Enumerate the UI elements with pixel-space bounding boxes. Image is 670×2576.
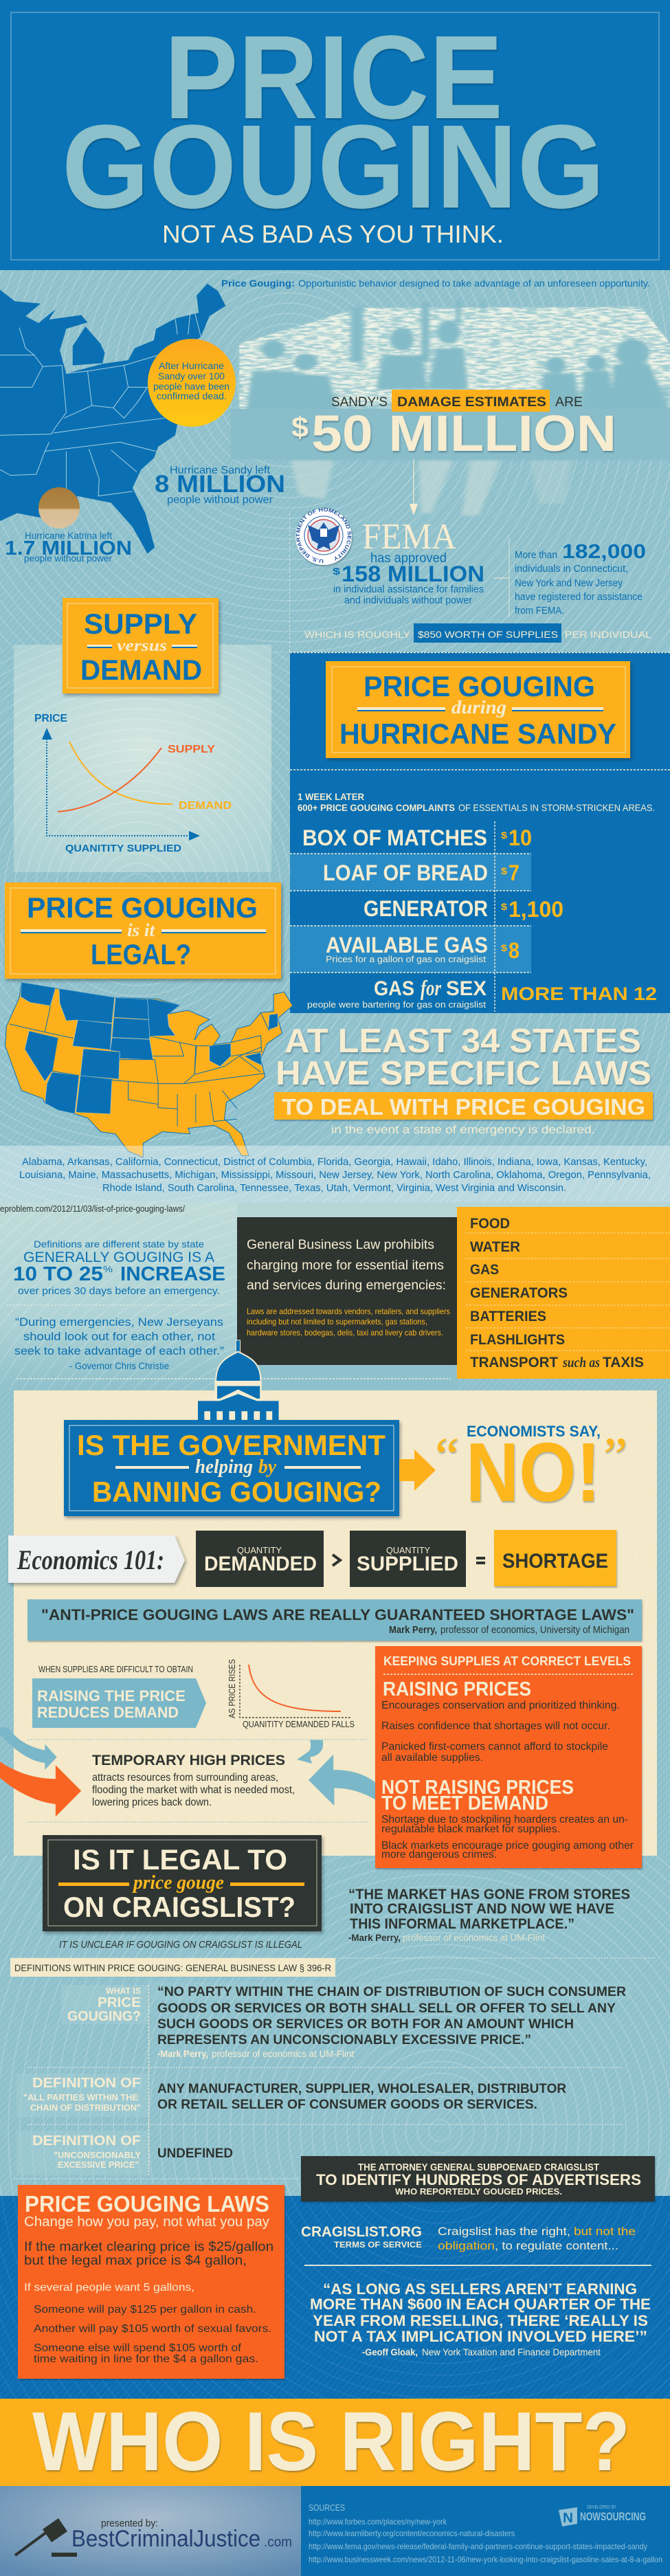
panel: price gouging laws: Change how you pay, not what you pay <box>24 2214 269 2230</box>
quote: market has gone: -Mark Perry, <box>348 1932 401 1943</box>
logo: nowsourcing: NOWSOURCING <box>580 2510 646 2523</box>
icon: gavel <box>15 2518 77 2557</box>
craigslist terms of service: TERMS OF SERVICE <box>334 2240 422 2250</box>
fema funding: in individual assistance for families <box>333 584 484 595</box>
heading: during hurricane sandy <box>326 661 630 758</box>
box: quantity supplied: SUPPLIED <box>357 1553 458 1575</box>
supplies per individual: PER INDIVIDUAL <box>565 629 651 640</box>
panel: general business law: hardware stores, bodegas, delis, taxi and livery cab drivers. <box>247 1328 443 1337</box>
economists say no: “ <box>435 1426 459 1486</box>
gouging percentage: INCREASE <box>120 1263 225 1285</box>
complaints note <box>298 791 655 813</box>
list of states <box>0 1146 670 1202</box>
symbol: greater than <box>333 1555 340 1566</box>
box: quantity demanded <box>196 1531 324 1587</box>
panel: supply and demand chart <box>14 645 271 872</box>
heading: is it legal on craigslist: IS IT LEGAL TO <box>73 1843 287 1876</box>
economists say no: NO! <box>466 1425 601 1519</box>
panel: price gouging during sandy <box>290 652 670 1013</box>
icon: capitol building <box>198 1340 279 1421</box>
footer: presented by: BestCriminalJustice <box>71 2526 260 2552</box>
callout: hurricane sandy dead: After Hurricane <box>159 360 224 371</box>
quote: chris christie: - Governor Chris Christie <box>69 1360 169 1371</box>
definition: what is price gouging: -Mark Perry, <box>157 2048 208 2059</box>
callout: hurricane sandy dead <box>148 339 236 427</box>
heading: is it legal on craigslist: ON CRAIGSLIST? <box>63 1891 295 1923</box>
damage estimates: DAMAGE ESTIMATES <box>397 395 546 410</box>
heading: supply versus demand: versus <box>117 637 167 655</box>
definition: what is price gouging: SUCH GOODS OR SERVICES OR BOTH FOR AN AMOUNT WHICH <box>157 2017 574 2032</box>
map: eastern united states <box>0 284 225 554</box>
big number: 50 MILLION <box>311 405 616 462</box>
panel: keeping supplies at correct levels: Panicked first-comers cannot afford to stockpile <box>381 1741 608 1753</box>
row: loaf of bread: $ <box>501 865 507 876</box>
left column: definitions <box>0 1202 670 1390</box>
fema registrations: New York and New Jersey <box>515 577 623 589</box>
logo: nowsourcing: DEVELOPED BY <box>587 2505 616 2510</box>
raising the price callout <box>32 1664 206 1728</box>
lower blue section <box>0 2196 670 2399</box>
definition: what is price gouging: GOODS OR SERVICES OR BOTH SHALL SELL OR OFFER TO SELL ANY <box>157 2001 616 2016</box>
temporary high prices <box>92 1753 295 1808</box>
row: generator: 1,100 <box>509 897 563 922</box>
row: gas for sex: MORE THAN 12 <box>501 984 657 1004</box>
craigslist terms of service <box>301 2224 636 2252</box>
quote: market has gone: INTO CRAIGSLIST AND NOW WE HAVE <box>350 1901 614 1917</box>
panel: general business law <box>237 1217 457 1365</box>
quote: anti-price gouging laws: "ANTI-PRICE GOUGING LAWS ARE REALLY GUARANTEED SHORTAGE LAWS" <box>41 1606 634 1623</box>
symbol: equals <box>476 1557 485 1564</box>
definition: all parties: OR RETAIL SELLER OF CONSUMER GOODS OR SERVICES. <box>157 2098 537 2112</box>
definition: what is price gouging: REPRESENTS AN UNCONSCIONABLY EXCESSIVE PRICE.” <box>157 2033 531 2047</box>
economists say no: ” <box>603 1426 627 1486</box>
title: price gouging: PRICE <box>164 10 503 144</box>
fema registrations: 182,000 <box>562 541 646 563</box>
heading: at least 34 states: HAVE SPECIFIC LAWS <box>276 1055 651 1092</box>
stat: katrina 1.7 million: people without power <box>24 553 112 564</box>
chart: demand curve <box>227 1659 355 1729</box>
chart: demand curve: QUANITITY DEMANDED FALLS <box>243 1719 355 1729</box>
quote: geoff gloak: NOT A TAX IMPLICATION INVOLVED HERE’” <box>314 2328 647 2345</box>
panel: price gouging laws: Someone else will spend $105 worth of <box>34 2342 242 2354</box>
fema registrations: have registered for assistance <box>515 591 643 603</box>
panel: essential items list: GENERATORS <box>470 1285 568 1301</box>
panel: keeping supplies at correct levels: all available supplies. <box>381 1752 483 1764</box>
quote: anti-price gouging laws <box>27 1599 642 1641</box>
definition: unconscionably excessive price: UNDEFINED <box>157 2146 233 2161</box>
definition: unconscionably excessive price <box>16 2131 233 2175</box>
footer: presented by <box>0 2486 301 2576</box>
chart: demand curve: AS PRICE RISES <box>227 1659 237 1718</box>
panel: essential items list: GAS <box>470 1262 499 1278</box>
quote: geoff gloak: MORE THAN $600 IN EACH QUARTER OF THE <box>310 2296 651 2313</box>
heading: supply versus demand <box>63 598 219 693</box>
raising the price callout: WHEN SUPPLIES ARE DIFFICULT TO OBTAIN <box>38 1664 193 1674</box>
fema funding: has approved <box>370 551 447 566</box>
panel: keeping supplies at correct levels: more dangerous crimes. <box>381 1849 497 1861</box>
quote: chris christie <box>14 1315 224 1371</box>
fema funding <box>333 517 484 606</box>
title banner <box>0 0 670 270</box>
craigslist terms of service: CRAGISLIST.ORG <box>301 2224 422 2240</box>
stat: katrina 1.7 million <box>5 530 132 564</box>
row: box of matches: 10 <box>509 825 532 850</box>
panel: keeping supplies at correct levels <box>375 1646 642 1868</box>
tag: economics 101: Economics 101: <box>16 1544 164 1575</box>
arrow: damage to fema <box>410 459 418 515</box>
quote: market has gone: “THE MARKET HAS GONE FROM STORES <box>348 1887 630 1902</box>
definition: unconscionably excessive price: EXCESSIVE PRICE" <box>58 2159 139 2170</box>
box: quantity supplied <box>350 1531 466 1587</box>
gouging percentage: Definitions are different state by state <box>34 1239 204 1250</box>
stat: sandy 8 million: 8 MILLION <box>155 471 285 498</box>
callout: attorney general <box>301 2156 655 2201</box>
fema funding: 158 MILLION <box>342 562 484 586</box>
definition: what is price gouging: “NO PARTY WITHIN THE CHAIN OF DISTRIBUTION OF SUCH CONSUMER <box>157 1985 626 1999</box>
supplies per individual: WHICH IS ROUGHLY <box>304 629 411 640</box>
row: gas for sex <box>307 975 657 1010</box>
row: gas for sex: GAS <box>374 977 414 1000</box>
quote: chris christie: should look out for each other, not <box>23 1330 215 1343</box>
row: generator: $ <box>501 901 507 912</box>
gouging percentage <box>13 1239 225 1297</box>
fema registrations <box>493 538 646 617</box>
panel: essential items list: FOOD <box>470 1216 510 1232</box>
panel: keeping supplies at correct levels: Black markets encourage price gouging among other <box>381 1840 634 1852</box>
quote: anti-price gouging laws: professor of economics, University of Michigan <box>440 1624 629 1636</box>
panel: essential items list: such as <box>562 1354 600 1370</box>
quote: market has gone: THIS INFORMAL MARKETPLACE.” <box>350 1916 574 1932</box>
panel: essential items list: FLASHLIGHTS <box>470 1332 565 1348</box>
panel: essential items list <box>457 1207 670 1379</box>
heading: during hurricane sandy: during <box>451 697 506 718</box>
definition: all parties: CHAIN OF DISTRIBUTION" <box>30 2102 141 2113</box>
panel: keeping supplies at correct levels: Shortage due to stockpiling hoarders creates an un- <box>381 1814 628 1825</box>
footer: sources: http://www.forbes.com/places/ny/new-york <box>309 2517 447 2527</box>
heading: is it legal on craigslist: price gouge <box>132 1872 224 1894</box>
callout: hurricane sandy dead: Sandy over 100 <box>158 370 225 381</box>
heading: supply versus demand: SUPPLY <box>84 608 197 640</box>
stat: sandy 8 million <box>155 465 285 506</box>
temporary high prices: lowering prices back down. <box>92 1797 212 1808</box>
arrow: to economists <box>399 1450 436 1491</box>
footer: sources <box>301 2486 670 2576</box>
panel: keeping supplies at correct levels: TO MEET DEMAND <box>381 1792 548 1814</box>
heading: during hurricane sandy: PRICE GOUGING <box>364 670 595 702</box>
quote: market has gone: professor of economics at UM-Flint <box>403 1932 545 1943</box>
panel: supply and demand chart: PRICE <box>34 713 67 724</box>
list of states: Louisiana, Maine, Massachusetts, Michigan, Mississippi, Missouri, New Jersey, New York, North Carolina, Oklahoma, Oregon, Pennsylvania, <box>19 1169 651 1181</box>
panel: general business law: charging more for essential items <box>247 1258 444 1273</box>
heading: is it legal: PRICE GOUGING <box>27 891 258 924</box>
row: loaf of bread: LOAF OF BREAD <box>323 860 488 885</box>
panel: general business law: including but not limited to supermarkets, gas stations, <box>247 1317 427 1326</box>
heading: is the government helping <box>64 1420 399 1516</box>
panel: essential items list: TRANSPORT <box>470 1355 558 1370</box>
panel: price gouging laws: Someone will pay $125 per gallon in cash. <box>34 2304 256 2316</box>
row: available gas: AVAILABLE GAS <box>326 933 488 957</box>
complaints note: 1 WEEK LATER <box>298 791 364 802</box>
panel: price gouging laws <box>18 2185 284 2379</box>
heading: is the government helping: IS THE GOVERNMENT <box>77 1429 386 1461</box>
panel: price gouging laws: PRICE GOUGING LAWS <box>25 2191 269 2217</box>
row: gas for sex: people were bartering for gas on craigslist <box>307 999 486 1010</box>
panel: essential items list: WATER <box>470 1239 520 1255</box>
heading: is the government helping: helping <box>195 1456 253 1478</box>
panel: price gouging laws: but the legal max price is $4 gallon, <box>24 2254 247 2268</box>
map: states with price gouging laws <box>5 982 293 1157</box>
definition: what is price gouging: PRICE <box>98 1995 141 2010</box>
row: box of matches: $ <box>501 830 507 841</box>
title: price gouging <box>62 10 605 233</box>
quote: geoff gloak: New York Taxation and Finance Department <box>422 2346 601 2357</box>
definitions heading: DEFINITIONS WITHIN PRICE GOUGING: GENERAL BUSINESS LAW § 396-R <box>14 1962 331 1973</box>
gouging percentage: over prices 30 days before an emergency. <box>18 1285 220 1297</box>
definition: all parties: ANY MANUFACTURER, SUPPLIER, WHOLESALER, DISTRIBUTOR <box>157 2082 566 2096</box>
fema funding: and individuals without power <box>344 595 472 606</box>
panel: price gouging laws: Another will pay $105 worth of sexual favors. <box>34 2323 271 2335</box>
panel: keeping supplies at correct levels: NOT RAISING PRICES <box>381 1777 574 1799</box>
heading: is it legal: LEGAL? <box>91 938 191 970</box>
quote: geoff gloak: “AS LONG AS SELLERS AREN’T EARNING <box>323 2280 637 2298</box>
complaints note: 600+ PRICE GOUGING COMPLAINTS <box>298 802 455 813</box>
note: unclear: IT IS UNCLEAR IF GOUGING ON CRAIGSLIST IS ILLEGAL <box>59 1939 302 1951</box>
fema funding: $ <box>333 566 340 577</box>
definitions heading <box>10 1958 335 1977</box>
quote: anti-price gouging laws: Mark Perry, <box>389 1624 437 1636</box>
definition: what is price gouging: WHAT IS <box>106 1986 141 1996</box>
definition: what is price gouging: GOUGING? <box>67 2009 141 2024</box>
row: loaf of bread: 7 <box>509 860 520 885</box>
callout: hurricane sandy dead: people have been <box>153 381 230 392</box>
panel: price gouging laws: If several people want 5 gallons, <box>24 2282 194 2294</box>
stat: sandy 8 million: people without power <box>167 494 273 506</box>
gouging percentage: GENERALLY GOUGING IS A <box>23 1250 214 1265</box>
temporary high prices: TEMPORARY HIGH PRICES <box>92 1753 285 1768</box>
heading: is it legal: is it <box>127 920 155 940</box>
list of states: Rhode Island, South Carolina, Tennessee, Texas, Utah, Vermont, Virginia, West Virginia and Wisconsin. <box>102 1182 566 1194</box>
definition: all parties: DEFINITION OF <box>32 2076 141 2091</box>
quote: geoff gloak: YEAR FROM RESELLING, THERE ‘REALLY IS <box>313 2312 648 2329</box>
gouging percentage: 10 TO 25 <box>13 1263 103 1285</box>
complaints note: OF ESSENTIALS IN STORM-STRICKEN AREAS. <box>458 802 655 813</box>
logo: nowsourcing: N <box>563 2511 573 2526</box>
quote: chris christie: seek to take advantage of each other.” <box>14 1344 224 1357</box>
stat: katrina 1.7 million: Hurricane Katrina left <box>25 530 112 541</box>
box: shortage <box>494 1530 616 1586</box>
footer: presented by: .com <box>264 2535 292 2550</box>
quote: geoff gloak: -Geoff Gloak, <box>362 2346 418 2357</box>
row: available gas: 8 <box>509 938 520 963</box>
row: available gas: Prices for a gallon of gas on craigslist <box>326 954 486 964</box>
definition: all parties: "ALL PARTIES WITHIN THE <box>23 2092 138 2102</box>
temporary high prices: attracts resources from surrounding areas, <box>92 1772 278 1784</box>
definition: what is price gouging: professor of economics at UM-Flint <box>212 2048 354 2059</box>
row: gas for sex: for <box>421 975 441 1000</box>
temporary high prices: flooding the market with what is needed most, <box>92 1784 295 1796</box>
heading: is the government helping: BANNING GOUGING? <box>92 1476 381 1508</box>
damage estimates <box>291 390 616 462</box>
panel: supply and demand chart: QUANITITY SUPPLIED <box>65 843 181 854</box>
heading: is the government helping: by <box>258 1456 277 1478</box>
big number: $ <box>291 411 309 443</box>
gouging percentage: % <box>103 1264 113 1274</box>
raising the price callout: RAISING THE PRICE <box>37 1687 186 1705</box>
panel: keeping supplies at correct levels: KEEPING SUPPLIES AT CORRECT LEVELS <box>383 1654 631 1668</box>
heading: at least 34 states: in the event a state of emergency is declared. <box>331 1123 595 1136</box>
definition: unconscionably excessive price: DEFINITION OF <box>32 2133 141 2148</box>
callout: attorney general: WHO REPORTEDLY GOUGED PRICES. <box>395 2186 562 2197</box>
callout: hurricane sandy dead: confirmed dead. <box>157 390 227 401</box>
craigslist terms of service: obligation <box>438 2239 495 2252</box>
heading: at least 34 states <box>274 1023 653 1136</box>
panel: keeping supplies at correct levels: RAISING PRICES <box>383 1678 531 1700</box>
row: available gas: $ <box>501 942 507 953</box>
tag: economics 101 <box>8 1535 185 1583</box>
panel: cream economics section <box>14 1390 657 1856</box>
callout: attorney general: THE ATTORNEY GENERAL SUBPOENAED CRAIGSLIST <box>358 2162 599 2173</box>
economics 101 equation <box>8 1530 616 1587</box>
supplies per individual <box>290 513 651 652</box>
heading: is it legal <box>5 882 281 979</box>
fema registrations: More than <box>515 549 557 561</box>
heading: is it legal on craigslist <box>43 1835 322 1931</box>
heading: at least 34 states: TO DEAL WITH PRICE GOUGING <box>282 1094 645 1120</box>
icon: homeland security seal: U.S. DEPARTMENT OF HOMELAND SECURITY <box>295 507 352 564</box>
list of states: Alabama, Arkansas, California, Connecticut, District of Columbia, Florida, Georgia, Hawaii, Idaho, Illinois, Indiana, Iowa, Kansas, Kentucky, <box>22 1156 647 1168</box>
stat: sandy 8 million: Hurricane Sandy left <box>170 465 271 476</box>
definition: all parties <box>16 2074 566 2117</box>
craigslist terms of service: but not the <box>574 2225 636 2238</box>
photo: flood silhouettes <box>231 300 670 515</box>
panel: price gouging laws: If the market clearing price is $25/gallon <box>24 2240 273 2254</box>
row: gas for sex: SEX <box>446 977 487 1000</box>
panel: supply and demand chart: SUPPLY <box>168 744 215 755</box>
economists say no: ECONOMISTS SAY, <box>467 1423 601 1440</box>
logo: nowsourcing <box>559 2505 646 2527</box>
panel: supply and demand chart: DEMAND <box>179 800 232 812</box>
banner: who is right: WHO IS RIGHT? <box>32 2395 630 2488</box>
panel: keeping supplies at correct levels: regulatable black market for supplies. <box>381 1823 560 1835</box>
callout: attorney general: TO IDENTIFY HUNDREDS OF ADVERTISERS <box>316 2171 641 2188</box>
footer: presented by: presented by: <box>101 2518 158 2529</box>
arrows: into temporary high prices <box>0 1727 375 1817</box>
raising the price callout: REDUCES DEMAND <box>37 1704 179 1721</box>
box: shortage: SHORTAGE <box>502 1550 608 1573</box>
craigslist terms of service: Craigslist has the right, <box>438 2225 570 2238</box>
supplies per individual: $850 WORTH OF SUPPLIES <box>418 629 558 640</box>
stat: katrina 1.7 million: 1.7 MILLION <box>5 537 132 559</box>
box: quantity demanded: QUANTITY <box>237 1545 282 1555</box>
damage estimates: ARE <box>555 395 583 410</box>
quote: market has gone <box>348 1887 630 1943</box>
panel: general business law: General Business Law prohibits <box>247 1238 434 1252</box>
panel: keeping supplies at correct levels: Raises confidence that shortages will not occur. <box>381 1720 610 1732</box>
panel: essential items list: TAXIS <box>603 1355 644 1370</box>
title: price gouging: GOUGING <box>62 100 605 233</box>
panel: general business law: and services during emergencies: <box>247 1278 446 1293</box>
fema funding: FEMA <box>362 517 456 557</box>
row: generator <box>364 896 563 922</box>
panel: general business law: Laws are addressed towards vendors, retailers, and suppliers <box>247 1307 450 1316</box>
heading: at least 34 states: AT LEAST 34 STATES <box>284 1023 641 1060</box>
definition: what is price gouging <box>61 1982 631 2059</box>
row: box of matches: BOX OF MATCHES <box>302 825 487 850</box>
heading: supply versus demand: DEMAND <box>80 654 202 686</box>
quote: geoff gloak <box>310 2280 651 2357</box>
source link: eproblem.com/2012/11/03/list-of-price-gouging-laws/ <box>0 1203 185 1214</box>
definition line: Opportunistic behavior designed to take advantage of an unforeseen opportunity. <box>298 278 650 289</box>
panel: keeping supplies at correct levels: Encourages conservation and prioritized thinking. <box>381 1700 620 1711</box>
footer: sources: SOURCES <box>309 2502 345 2513</box>
heading: during hurricane sandy: HURRICANE SANDY <box>339 718 616 750</box>
craigslist terms of service: , to regulate content... <box>495 2239 618 2252</box>
quote: chris christie: “During emergencies, New Jerseyans <box>15 1315 223 1329</box>
box: quantity demanded: DEMANDED <box>204 1553 317 1575</box>
damage estimates: SANDY’S <box>331 395 388 410</box>
subtitle: NOT AS BAD AS YOU THINK. <box>162 220 504 248</box>
box: quantity supplied: QUANTITY <box>386 1545 430 1555</box>
definition line: Price Gouging: <box>221 278 295 289</box>
definition: unconscionably excessive price: "UNCONSCIONABLY <box>54 2150 141 2160</box>
panel: essential items list: BATTERIES <box>470 1309 546 1324</box>
icon: katrina circle <box>38 487 80 529</box>
fema registrations: individuals in Connecticut, <box>515 563 628 575</box>
fema registrations: from FEMA. <box>515 605 564 617</box>
footer: sources: http://www.learnliberty.org/content/economics-natural-disasters <box>309 2529 515 2538</box>
panel: price gouging laws: time waiting in line for the $4 a gallon gas. <box>34 2353 258 2365</box>
row: generator: GENERATOR <box>364 896 488 921</box>
